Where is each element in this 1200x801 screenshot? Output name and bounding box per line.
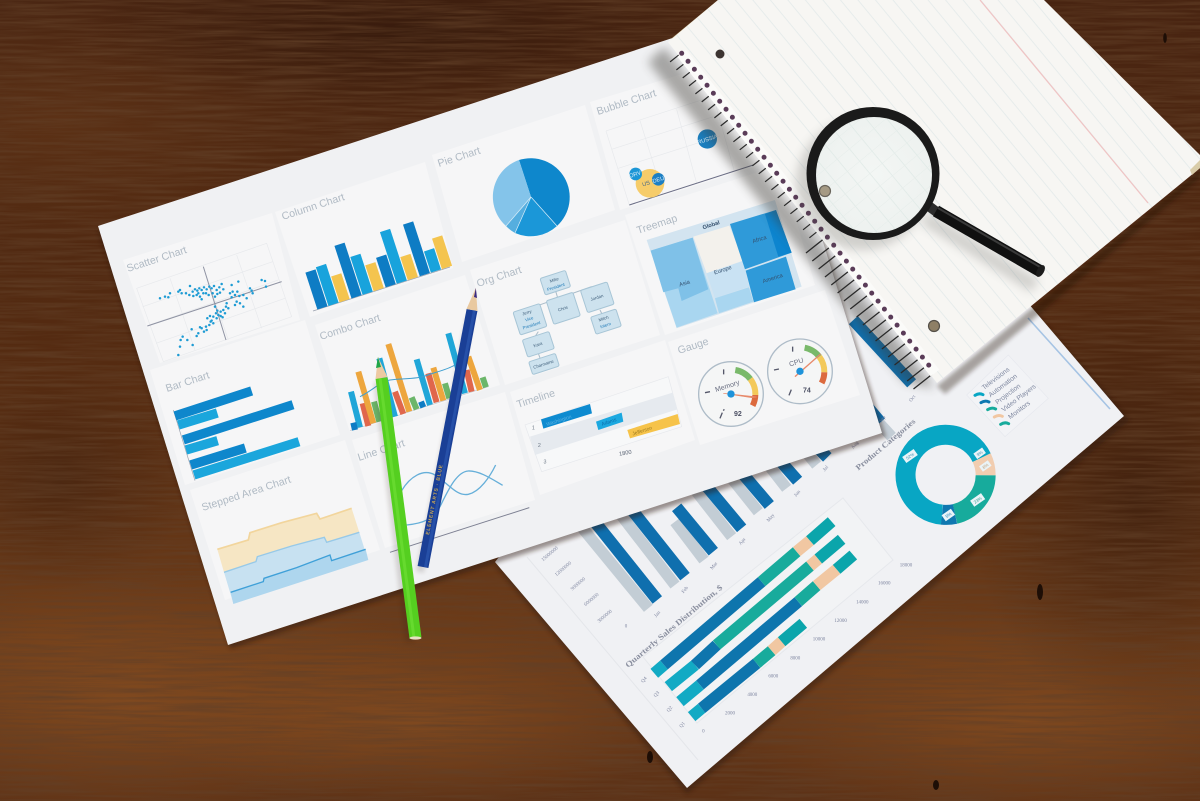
panel: bar chart: Bar Chart xyxy=(164,369,211,395)
lens xyxy=(806,107,940,240)
panel: stepped area chart xyxy=(200,474,368,604)
heading: quarterly sales distribution: Quarterly Sales Distribution, $ xyxy=(624,583,724,670)
column chart axis labels: 3000000 xyxy=(597,609,614,624)
panel: treemap: Africa xyxy=(752,235,768,245)
panel: timeline: Jefferson xyxy=(632,425,653,437)
spiral binding xyxy=(674,53,935,388)
panel: treemap: Global xyxy=(702,220,721,231)
gauge: cpu xyxy=(768,339,832,404)
panel: org chart: Chris xyxy=(557,305,568,312)
pencil: blue xyxy=(420,288,478,572)
notebook shadow: on the sheets xyxy=(648,47,935,388)
panel: bubble chart: DEU xyxy=(652,176,665,185)
gauge: memory: 92 xyxy=(734,411,742,418)
panel: bubble chart: Bubble Chart xyxy=(595,87,658,118)
column chart axis labels: 12000000 xyxy=(554,561,573,578)
panel: timeline xyxy=(515,377,682,472)
donut chart: product categories xyxy=(854,417,992,521)
notebook xyxy=(648,0,1200,394)
donut chart: product categories: 9% xyxy=(976,450,984,457)
panel: timeline: Adams xyxy=(601,417,618,428)
panel: treemap: Europe xyxy=(713,265,733,276)
stacked bar chart axis labels: 0 xyxy=(702,730,705,735)
panel: bubble chart xyxy=(595,87,753,205)
stacked bar chart axis labels: 18000 xyxy=(900,563,913,568)
punched holes xyxy=(716,50,940,332)
panel: timeline: Timeline xyxy=(515,387,557,411)
column chart axis labels: Feb xyxy=(681,585,690,595)
legend: product categories xyxy=(967,355,1048,437)
panel: pie chart xyxy=(436,145,570,236)
panel: timeline: 1 xyxy=(532,425,535,431)
column chart axis labels xyxy=(541,394,918,629)
panel: org chart: Vice xyxy=(524,315,534,323)
stacked bar chart axis labels: Q3 xyxy=(653,690,661,699)
panel: org chart: Mike xyxy=(549,276,560,284)
column chart axis labels: 6000000 xyxy=(584,592,601,608)
panel: column chart: Column Chart xyxy=(280,191,346,223)
stacked bar chart axis labels: 6000 xyxy=(768,675,779,680)
panel: timeline: Washington xyxy=(546,414,573,428)
legend: product categories: Projection xyxy=(994,383,1022,406)
back sheet: sales report xyxy=(495,190,1130,794)
chart frame: quarterly sales xyxy=(643,498,893,723)
column chart axis labels: Apr xyxy=(739,537,748,547)
stacked bar chart: quarters xyxy=(654,522,853,717)
stacked bar chart axis labels: 8000 xyxy=(790,656,801,661)
column chart axis labels: Jun xyxy=(794,489,802,498)
stacked bar chart axis labels xyxy=(641,563,913,735)
panel: stepped area chart: Stepped Area Chart xyxy=(200,474,292,514)
stacked bar chart axis labels: 16000 xyxy=(878,582,891,587)
magnifier shadow xyxy=(796,118,1035,286)
panel: org chart: President xyxy=(546,281,566,292)
column chart axis labels: Mar xyxy=(710,561,719,571)
legend: product categories: Video Players xyxy=(1001,383,1038,414)
stacked bar chart axis labels: Q1 xyxy=(679,721,687,729)
panel: combo chart: Combo Chart xyxy=(318,312,382,343)
panel: combo chart xyxy=(318,312,488,431)
panel: treemap: Asia xyxy=(679,279,692,289)
panel: timeline: 2 xyxy=(538,443,541,449)
column chart axis labels: Aug xyxy=(851,440,861,451)
panel: bubble chart: RUSSIA xyxy=(697,134,719,146)
gauge: cpu: CPU xyxy=(788,357,805,369)
panel: timeline: 3 xyxy=(544,460,547,466)
pencil: blue: ELEMENT ARTS · BLUE xyxy=(425,464,445,535)
panel: org chart: Jordan xyxy=(590,293,604,302)
panel: bubble chart: US xyxy=(642,180,651,188)
stacked bar chart axis labels: 4000 xyxy=(747,693,758,698)
donut chart: product categories: Product Categories xyxy=(854,417,917,472)
column chart axis labels: Sep xyxy=(879,415,888,424)
panel: org chart: Mitch xyxy=(598,314,610,323)
margin line xyxy=(980,0,1148,203)
panel: line chart: Line Chart xyxy=(356,437,406,464)
donut chart: product categories: 5% xyxy=(944,511,953,519)
column chart axis labels: 15000000 xyxy=(541,546,560,563)
panel: org chart: Charmaine xyxy=(533,358,555,370)
column chart axis labels: 0 xyxy=(625,624,628,629)
magnifying glass xyxy=(796,107,1047,286)
column chart: monthly bars xyxy=(572,320,912,608)
stacked bar chart axis labels: 14000 xyxy=(856,601,869,606)
panel: column chart xyxy=(280,191,450,311)
legend: product categories: Automation xyxy=(988,373,1019,399)
panel: org chart: Intern xyxy=(599,321,612,329)
panel: gauges xyxy=(676,336,832,426)
column chart axis labels: May xyxy=(766,513,776,523)
panel: org chart: Org Chart xyxy=(475,264,523,290)
panel: scatter chart xyxy=(125,243,292,362)
stacked bar chart axis labels: Q4 xyxy=(641,676,649,684)
panel: bar chart xyxy=(164,369,299,481)
front sheet: chart gallery xyxy=(98,12,886,649)
stacked bar chart axis labels: Q2 xyxy=(666,705,674,714)
stacked bar chart axis labels: 2000 xyxy=(725,712,735,717)
column chart axis labels: Oct xyxy=(909,394,918,403)
panel: treemap: Treemap xyxy=(635,212,679,237)
panel: line chart xyxy=(356,437,529,552)
panel: scatter chart: Scatter Chart xyxy=(125,244,188,275)
donut chart: product categories: 52% xyxy=(905,452,915,461)
panel: pie chart: Pie Chart xyxy=(436,145,482,170)
notebook shadow: on the table xyxy=(937,170,1200,394)
gauge: cpu: 74 xyxy=(803,388,811,395)
panel: timeline: 1800 xyxy=(619,450,632,458)
panel: org chart: Jerry xyxy=(522,308,533,316)
column chart axis labels: Jul xyxy=(822,465,830,473)
panel: gauges: Gauge xyxy=(676,336,710,357)
legend: product categories: Televisions xyxy=(981,366,1012,392)
column chart axis labels: 9000000 xyxy=(570,577,587,592)
panel: treemap: America xyxy=(762,273,785,285)
column chart axis labels: Jan xyxy=(654,610,662,619)
pencil: green xyxy=(376,357,422,642)
handle xyxy=(926,204,1047,278)
gauge: memory xyxy=(699,362,763,426)
donut chart: product categories: 23% xyxy=(973,496,983,505)
donut chart: product categories: 6% xyxy=(981,462,990,470)
stacked bar chart axis labels: 12000 xyxy=(834,619,847,624)
panel: org chart: Kara xyxy=(533,341,544,348)
stacked bar chart axis labels: 10000 xyxy=(813,638,826,643)
gauge: memory: Memory xyxy=(714,379,741,394)
panel: org chart: President xyxy=(522,320,542,330)
legend: product categories: Monitors xyxy=(1007,400,1032,421)
panel: bubble chart: ORV xyxy=(629,170,642,180)
panel: org chart xyxy=(475,264,621,375)
panel: treemap xyxy=(635,200,802,328)
